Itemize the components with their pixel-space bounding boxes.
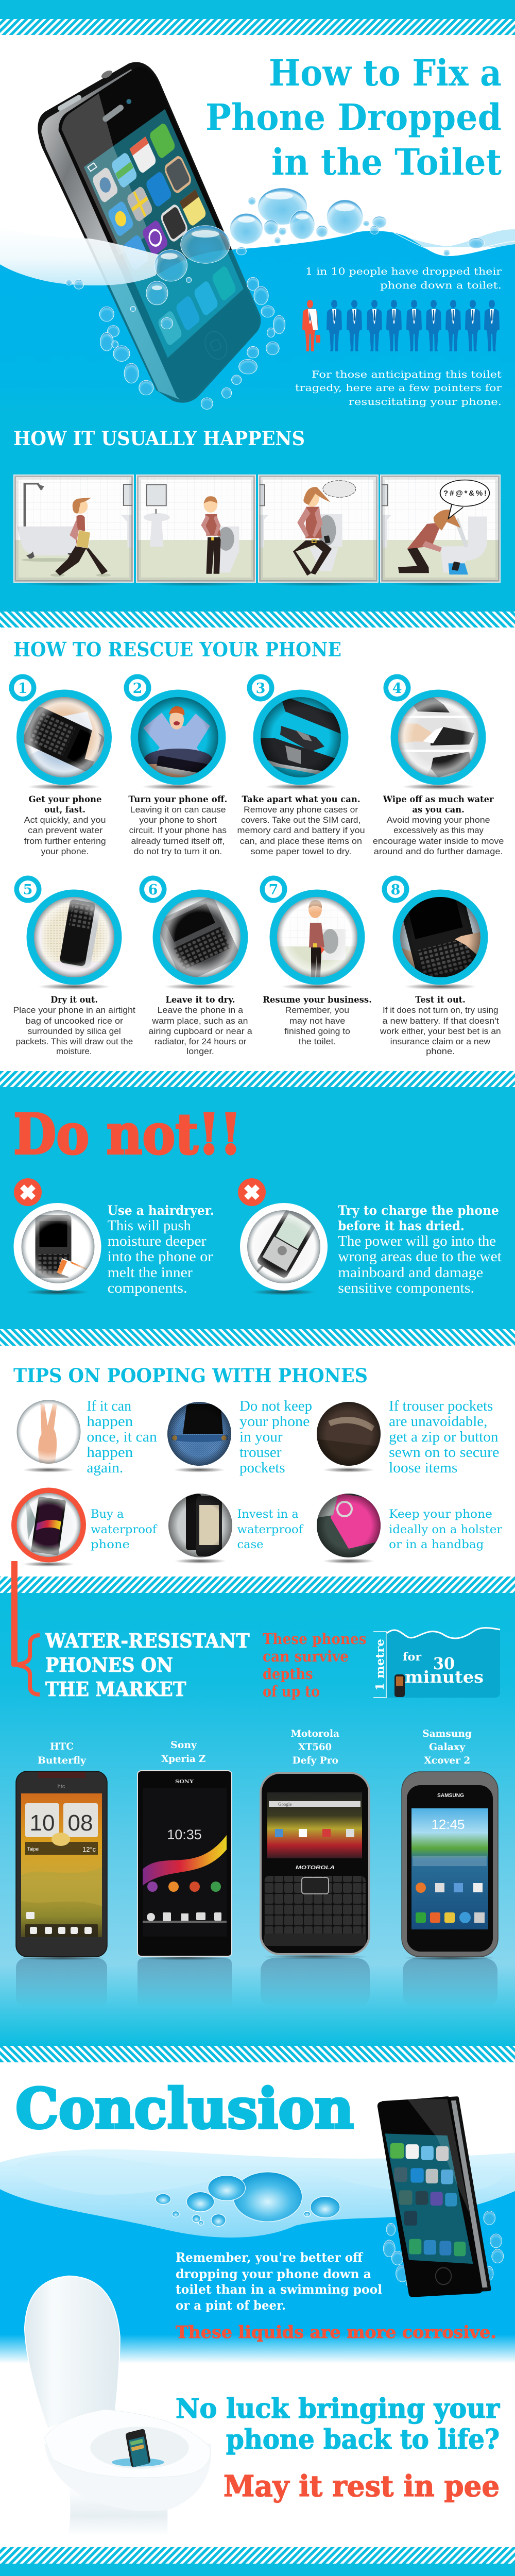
text block: steps 5-8: may not have bbox=[289, 1016, 345, 1026]
text block: steps 5-8: moisture. bbox=[56, 1046, 92, 1056]
title: Phone Dropped bbox=[205, 96, 502, 139]
silver edge bbox=[383, 2098, 489, 2294]
graphic: 1 metre for 30 minutes: 1 metre bbox=[373, 1639, 386, 1691]
step 4 bbox=[383, 674, 486, 790]
tip: phone in jeans bbox=[166, 1401, 232, 1472]
text block: tips row 2 bbox=[91, 1508, 503, 1551]
panel: rescue steps row 2 bbox=[14, 876, 488, 990]
title: in the Toilet bbox=[271, 141, 502, 183]
title bbox=[205, 52, 502, 183]
callout: no luck bbox=[176, 2393, 500, 2455]
app icons bbox=[91, 122, 207, 272]
phone: Sony Xperia Z bbox=[138, 1771, 232, 2007]
phone: conclusion iPhone bbox=[381, 2098, 504, 2294]
text block: tips row 2: Keep your phone bbox=[389, 1508, 492, 1521]
text block: tips row 1: in your bbox=[239, 1429, 283, 1445]
step 1: 1 bbox=[18, 681, 27, 697]
title: How to Fix a bbox=[269, 52, 502, 94]
stripe divider bbox=[0, 19, 515, 35]
stripe divider bbox=[0, 1071, 515, 1087]
bubble highlights bbox=[152, 192, 355, 290]
text block: tips row 1: get a zip or button bbox=[389, 1429, 499, 1445]
text block: steps 5-8: Test it out. bbox=[415, 995, 466, 1005]
stripe divider bbox=[0, 2046, 515, 2062]
text block: depths: can survive bbox=[263, 1648, 349, 1665]
text block: steps 5-8: Remember, you bbox=[285, 1005, 349, 1015]
text block: steps 5-8: Place your phone in an airtight bbox=[13, 1005, 135, 1015]
callout: no luck: phone back to life? bbox=[226, 2424, 500, 2455]
intro text: tragedy, here are a few pointers for bbox=[295, 382, 502, 394]
screen bbox=[84, 109, 244, 358]
phone: HTC Butterfly: 10 bbox=[30, 1810, 55, 1836]
panel shadows bbox=[22, 581, 492, 586]
graphic: 1 metre for 30 minutes bbox=[373, 1628, 500, 1698]
text block: steps 1-4: from further entering bbox=[24, 836, 106, 846]
text block: depths bbox=[263, 1630, 367, 1700]
text block: tips row 1: your phone bbox=[239, 1414, 310, 1430]
panel: conclusion water bbox=[0, 2149, 515, 2367]
text block: steps 1-4: encourage water inside to move bbox=[373, 836, 504, 846]
phone: Sony Xperia Z: 10:35 bbox=[167, 1827, 202, 1842]
text block: steps 1-4: Take apart what you can. bbox=[242, 794, 360, 804]
step 2: 2 bbox=[133, 681, 142, 697]
stripe divider bbox=[0, 1577, 515, 1593]
text block: steps 5-8: surrounded by silica gel bbox=[28, 1026, 121, 1036]
phone: HTC Butterfly: Taipei bbox=[27, 1846, 40, 1852]
text block: steps 5-8: radiator, for 24 hours or bbox=[154, 1037, 247, 1046]
phone: HTC Butterfly: htc bbox=[58, 1784, 65, 1790]
text block: depths: depths bbox=[263, 1665, 313, 1683]
text block: steps 1-4 bbox=[24, 794, 504, 856]
text block: steps 1-4: Leaving it on can cause bbox=[130, 805, 226, 815]
text block: tips row 1: If it can bbox=[87, 1398, 131, 1414]
intro text: resuscitating your phone. bbox=[349, 396, 502, 408]
step 7: 7 bbox=[269, 882, 278, 898]
panel: water-resistant background bbox=[0, 1593, 515, 2046]
text block: steps 5-8: work either, your best bet is an bbox=[380, 1026, 501, 1036]
phone names: XT560 bbox=[298, 1741, 332, 1753]
text block: steps 1-4: do not try to turn it on. bbox=[134, 846, 222, 856]
text block: remember: dropping your phone down a bbox=[176, 2266, 371, 2281]
callout: may it rest in pee: May it rest in pee bbox=[224, 2469, 500, 2503]
text block: steps 5-8: Leave the phone in a bbox=[158, 1005, 244, 1015]
text block: steps 5-8: insurance claim or a new bbox=[390, 1037, 491, 1046]
text block: steps 5-8: phone. bbox=[426, 1046, 455, 1056]
text block: hairdryer: This will push bbox=[108, 1218, 191, 1234]
heading: water-resistant: THE MARKET bbox=[45, 1677, 186, 1701]
stripe divider bbox=[0, 1329, 515, 1346]
text block: tips row 1: are unavoidable, bbox=[389, 1414, 487, 1430]
text block: hairdryer bbox=[108, 1203, 214, 1296]
phone names: Galaxy bbox=[429, 1741, 466, 1753]
text block: charge: sensitive components. bbox=[338, 1280, 474, 1296]
heading: tips: TIPS ON POOPING WITH PHONES bbox=[13, 1364, 368, 1387]
text block: tips row 1: Do not keep bbox=[239, 1398, 312, 1414]
heading: water-resistant: PHONES ON bbox=[45, 1653, 173, 1676]
glass reflection bbox=[61, 93, 149, 256]
text block: tips row 1: again. bbox=[87, 1460, 123, 1476]
step 5: 5 bbox=[23, 882, 32, 898]
text block: steps 5-8: packets. This will draw out the bbox=[16, 1037, 133, 1046]
text block: charge: wrong areas due to the wet bbox=[338, 1249, 502, 1265]
graphic: 1 metre for 30 minutes: 30 bbox=[433, 1654, 455, 1673]
stat text: phone down a toilet. bbox=[380, 280, 502, 291]
text block: tips row 2: or in a handbag bbox=[389, 1538, 484, 1551]
phone: Motorola XT560: Google bbox=[278, 1802, 291, 1807]
stripe divider bbox=[0, 612, 515, 628]
panel: sources background bbox=[0, 2564, 515, 2576]
text block: steps 1-4: as you can. bbox=[412, 805, 465, 815]
text block: steps 1-4: already turned itself off, bbox=[131, 836, 225, 846]
intro text bbox=[295, 369, 502, 408]
icon: x bbox=[238, 1178, 266, 1206]
illustration: toilet bbox=[25, 2276, 211, 2536]
text block: steps 1-4: Remove any phone cases or bbox=[244, 805, 358, 815]
icon: x bbox=[14, 1178, 42, 1206]
silver band bbox=[41, 70, 179, 399]
underwater tint bbox=[107, 249, 261, 403]
side bubbles bbox=[383, 2211, 504, 2287]
tip: peace sign bbox=[16, 1400, 80, 1472]
tip: waterproof case bbox=[167, 1493, 233, 1564]
step 8 bbox=[382, 876, 488, 990]
phone: HTC Butterfly bbox=[16, 1771, 107, 2007]
text block: remember: Remember, you're better off bbox=[176, 2250, 363, 2265]
step 3 bbox=[247, 674, 348, 790]
text block: steps 1-4: around and do further damage. bbox=[374, 846, 503, 856]
text block: charge: before it has dried. bbox=[338, 1218, 465, 1233]
text block: tips row 2: waterproof bbox=[91, 1523, 158, 1536]
text block: tips row 1: If trouser pockets bbox=[389, 1398, 493, 1414]
phone: Sony Xperia Z: SONY bbox=[175, 1780, 194, 1785]
text block: tips row 2: case bbox=[237, 1538, 264, 1551]
text block: steps 5-8: Dry it out. bbox=[50, 995, 98, 1005]
phone names: Xcover 2 bbox=[424, 1755, 470, 1766]
face bbox=[381, 2100, 479, 2293]
heading: how to rescue your phone: HOW TO RESCUE YOUR PHONE bbox=[13, 638, 341, 661]
phone: Motorola XT560: MOTOROLA bbox=[296, 1865, 335, 1871]
text block: remember: or a pint of beer. bbox=[176, 2298, 286, 2313]
text block: steps 1-4: excessively as this may bbox=[393, 825, 484, 835]
text block: remember bbox=[176, 2250, 382, 2313]
text block: steps 5-8: warm place, such as an bbox=[151, 1016, 248, 1026]
panel: do not background bbox=[0, 1087, 515, 1329]
text block: tips row 1: once, it can bbox=[87, 1429, 157, 1445]
connector: red line and brace bbox=[11, 1561, 40, 1694]
stripe divider bbox=[0, 2547, 515, 2564]
text block: tips row 1: trouser bbox=[239, 1445, 282, 1461]
screen bbox=[385, 2133, 473, 2264]
text block: steps 1-4: out, fast. bbox=[44, 805, 85, 815]
text block: steps 1-4: memory card and battery if you bbox=[237, 825, 365, 835]
heading: how it usually happens: HOW IT USUALLY HAPPENS bbox=[13, 427, 305, 450]
phone: HTC Butterfly: 08 bbox=[68, 1810, 93, 1836]
text block: charge bbox=[338, 1203, 502, 1296]
panel: rescue steps row 1 bbox=[9, 674, 486, 790]
water droplets bbox=[156, 2172, 340, 2226]
panel inner shadows bbox=[15, 476, 499, 581]
phone: HTC Butterfly: 12°c bbox=[82, 1845, 96, 1853]
tip: holster bbox=[316, 1493, 382, 1564]
speech text: ?#@*&%! bbox=[443, 489, 487, 498]
step 1 bbox=[9, 674, 112, 790]
text block: steps 1-4: Avoid moving your phone bbox=[387, 815, 490, 825]
frame 1 bbox=[13, 474, 138, 583]
panel: how it usually happens background bbox=[0, 412, 515, 612]
text block: tips row 2: waterproof bbox=[237, 1523, 304, 1536]
dock icons bbox=[157, 264, 237, 347]
text block: steps 1-4: Turn your phone off. bbox=[128, 794, 227, 804]
graphic: 1 metre for 30 minutes: for bbox=[403, 1650, 422, 1663]
icon row: 1 in 10 people bbox=[302, 300, 500, 351]
phone names: Samsung bbox=[422, 1728, 472, 1739]
top band bbox=[0, 0, 515, 19]
phone names: HTC bbox=[50, 1741, 74, 1752]
intro text: For those anticipating this toilet bbox=[312, 369, 502, 380]
app grid bbox=[390, 2143, 466, 2256]
panel: tips row 2 bbox=[11, 1488, 382, 1567]
text block: steps 1-4: your phone to short bbox=[139, 815, 217, 825]
text block: tips row 1 bbox=[87, 1398, 499, 1476]
phone names: Sony bbox=[170, 1739, 197, 1751]
text block: tips row 1: pockets bbox=[239, 1460, 285, 1476]
heading: conclusion: Conclusion bbox=[15, 2077, 354, 2141]
text block: remember: toilet than in a swimming pool bbox=[176, 2282, 382, 2297]
text block: steps 5-8: bag of uncooked rice or bbox=[26, 1016, 123, 1026]
text block: depths: These phones bbox=[263, 1630, 367, 1648]
text block: steps 5-8: finished going to bbox=[284, 1026, 350, 1036]
step 6 bbox=[139, 876, 248, 990]
text block: steps 1-4: can, and place these items on bbox=[240, 836, 362, 846]
phone face bbox=[59, 67, 260, 400]
panel: hero water bbox=[0, 229, 515, 412]
frame 3 bbox=[256, 474, 379, 583]
text block: steps 5-8: airing cupboard or near a bbox=[148, 1026, 252, 1036]
phone: hero iPhone bbox=[38, 62, 261, 403]
home button bbox=[168, 289, 244, 362]
phone outer edge bbox=[38, 62, 261, 403]
phone: Samsung Galaxy Xcover 2 bbox=[402, 1772, 498, 2007]
stat text bbox=[305, 266, 502, 291]
phone names: Defy Pro bbox=[293, 1755, 338, 1766]
heading: water-resistant bbox=[45, 1629, 250, 1701]
text block: depths: of up to bbox=[263, 1683, 320, 1700]
text block: steps 5-8: If it does not turn on, try using bbox=[383, 1005, 499, 1015]
text block: tips row 1: happen bbox=[87, 1414, 133, 1430]
text block: hairdryer: melt the inner bbox=[108, 1265, 193, 1281]
phone: Samsung Galaxy Xcover 2: 12:45 bbox=[431, 1817, 465, 1832]
warning: hairdryer bbox=[13, 1178, 101, 1295]
text block: tips row 2: ideally on a holster bbox=[389, 1523, 503, 1536]
callout: no luck: No luck bringing your bbox=[176, 2393, 500, 2425]
text block: hairdryer: moisture deeper bbox=[108, 1233, 207, 1249]
callout: corrosive: These liquids are more corrosive. bbox=[176, 2322, 496, 2342]
text block: steps 1-4: circuit. If your phone has bbox=[129, 825, 227, 835]
panel: tips row 1 bbox=[16, 1400, 382, 1472]
text block: tips row 1: sewn on to secure bbox=[389, 1445, 499, 1461]
bubbles bbox=[66, 188, 485, 409]
heading: do not: Do not!! bbox=[13, 1102, 242, 1167]
phone names: Xperia Z bbox=[161, 1753, 205, 1765]
text block: steps 5-8: a new battery. If that doesn't bbox=[382, 1016, 499, 1026]
panel: comic strip bbox=[13, 474, 501, 586]
stat text: 1 in 10 people have dropped their bbox=[305, 266, 502, 277]
text block: steps 5-8 bbox=[13, 995, 501, 1056]
step 5 bbox=[14, 876, 122, 990]
text block: tips row 2: phone bbox=[91, 1538, 130, 1551]
phone names bbox=[38, 1728, 472, 1766]
step 6: 6 bbox=[148, 882, 158, 898]
step 8: 8 bbox=[391, 882, 400, 898]
text block: hairdryer: into the phone or bbox=[108, 1249, 213, 1265]
tip: trouser zip bbox=[316, 1401, 382, 1472]
text block: steps 1-4: covers. Take out the SIM card, bbox=[241, 815, 360, 825]
text block: steps 1-4: Wipe off as much water bbox=[383, 794, 494, 804]
text block: tips row 2: Invest in a bbox=[237, 1508, 299, 1521]
text block: steps 5-8: the toilet. bbox=[299, 1037, 336, 1046]
text block: hairdryer: Use a hairdryer. bbox=[108, 1203, 214, 1218]
text block: steps 5-8: Resume your business. bbox=[263, 995, 372, 1005]
graphic: 1 metre for 30 minutes: minutes bbox=[405, 1667, 484, 1687]
text block: charge: The power will go into the bbox=[338, 1233, 496, 1249]
text block: steps 1-4: some paper towel to dry. bbox=[251, 846, 351, 856]
text block: tips row 2: Buy a bbox=[91, 1508, 124, 1521]
wave swoosh over phone bbox=[0, 226, 159, 285]
step 7 bbox=[260, 876, 365, 990]
photo: phone and hairdryer bbox=[35, 1215, 88, 1278]
text block: steps 5-8: Leave it to dry. bbox=[165, 995, 235, 1005]
text block: steps 1-4: Act quickly, and you bbox=[24, 815, 106, 825]
phone: Motorola XT560 bbox=[261, 1773, 370, 2007]
phone names: Motorola bbox=[290, 1728, 339, 1739]
text block: steps 1-4: can prevent water bbox=[28, 825, 103, 835]
text block: steps 1-4: your phone. bbox=[41, 846, 89, 856]
phone: Samsung Galaxy Xcover 2: SAMSUNG bbox=[437, 1793, 464, 1799]
text block: charge: Try to charge the phone bbox=[338, 1203, 499, 1218]
warning: charge bbox=[238, 1178, 328, 1295]
step 4: 4 bbox=[392, 681, 402, 697]
text block: hairdryer: components. bbox=[108, 1280, 187, 1296]
step 3: 3 bbox=[256, 681, 265, 697]
photo: phone on charger bbox=[256, 1210, 315, 1278]
text block: steps 5-8: longer. bbox=[186, 1046, 214, 1056]
text block: steps 1-4: Get your phone bbox=[29, 794, 102, 804]
frame 2 bbox=[136, 474, 256, 583]
text block: charge: mainboard and damage bbox=[338, 1265, 483, 1281]
text block: tips row 1: loose items bbox=[389, 1460, 457, 1476]
text block: tips row 1: happen bbox=[87, 1445, 133, 1461]
step 2 bbox=[124, 674, 226, 790]
tip: waterproof phone bbox=[11, 1488, 86, 1567]
phone names: Butterfly bbox=[38, 1755, 87, 1766]
heading: water-resistant: WATER-RESISTANT bbox=[45, 1629, 250, 1652]
frame 4 bbox=[380, 474, 501, 583]
earpiece and camera bbox=[57, 69, 131, 172]
